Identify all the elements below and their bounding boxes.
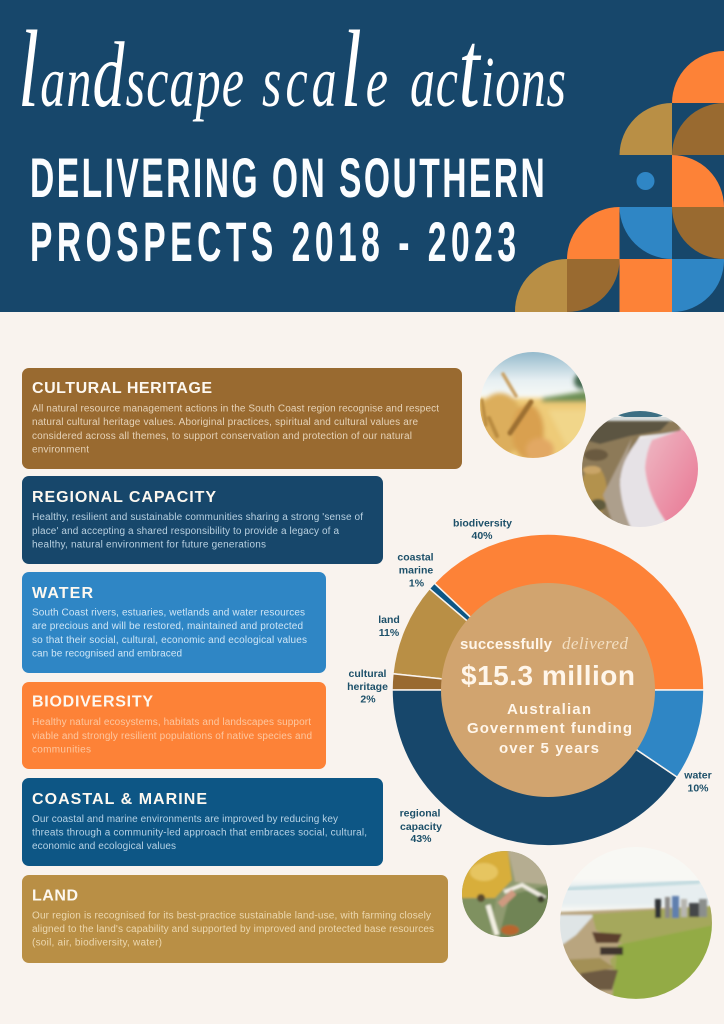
text: coastal and marine: threats through a community-led approach that embraces social, cultural, bbox=[32, 828, 367, 838]
script title: landscape bbox=[18, 9, 244, 130]
centre text: Australian bbox=[507, 701, 591, 718]
panel: coastal and marine bbox=[22, 778, 383, 866]
text: biodiversity: viable and strongly resilient populations of native species and bbox=[32, 731, 312, 742]
centre text: $15.3 million bbox=[461, 660, 635, 691]
heading: water: WATER bbox=[32, 585, 93, 602]
label: biodiversity 40%: 40% bbox=[471, 530, 493, 542]
label: cultural heritage 2%: heritage bbox=[347, 681, 388, 693]
text: coastal and marine bbox=[32, 814, 367, 852]
text: biodiversity bbox=[32, 717, 312, 756]
centre text: Government funding bbox=[467, 720, 632, 737]
heading: coastal and marine: COASTAL & MARINE bbox=[32, 791, 207, 808]
text: biodiversity: communities bbox=[32, 744, 91, 756]
text: coastal and marine: economic and ecological values bbox=[32, 841, 176, 852]
text: cultural heritage: All natural resource management actions in the South Coast region recognise and respect bbox=[32, 404, 439, 414]
heading: regional capacity: REGIONAL CAPACITY bbox=[32, 489, 216, 506]
text: regional capacity: place' and accepting a shared responsibility to provide a legacy of a bbox=[32, 526, 339, 537]
text: coastal and marine: Our coastal and marine environments are improved by reducing key bbox=[32, 814, 338, 825]
label: regional capacity 43%: 43% bbox=[410, 833, 432, 845]
text: water: can be recognised and embraced bbox=[32, 648, 182, 660]
label: water 10%: 10% bbox=[687, 782, 709, 794]
panel: biodiversity bbox=[22, 682, 326, 769]
main heading: DELIVERING ON SOUTHERN bbox=[30, 146, 545, 209]
main heading: PROSPECTS 2018 - 2023 bbox=[30, 210, 516, 273]
label: land 11%: 11% bbox=[379, 627, 400, 639]
text: biodiversity: Healthy natural ecosystems, habitats and landscapes support bbox=[32, 717, 311, 728]
text: cultural heritage: natural cultural heritage values. Aboriginal practices, spiritual and cultural values are bbox=[32, 417, 418, 428]
text: water bbox=[32, 608, 307, 660]
label: land 11%: land bbox=[378, 614, 400, 626]
label: cultural heritage 2%: cultural bbox=[349, 668, 387, 680]
centre text: successfully bbox=[460, 636, 553, 653]
photo: coastal plants bbox=[460, 850, 550, 940]
heading: cultural heritage: CULTURAL HERITAGE bbox=[32, 380, 212, 397]
text: cultural heritage: environment bbox=[32, 444, 89, 456]
centre circle bbox=[441, 583, 655, 797]
label: coastal marine 1%: coastal bbox=[397, 552, 434, 564]
geometric pattern bbox=[515, 51, 724, 312]
text: land bbox=[32, 910, 434, 948]
label: cultural heritage 2%: 2% bbox=[360, 694, 376, 706]
label: regional capacity 43%: regional bbox=[400, 808, 441, 820]
text: land: (soil, air, biodiversity, water) bbox=[32, 938, 162, 948]
heading: biodiversity: BIODIVERSITY bbox=[32, 694, 153, 710]
label: coastal marine 1%: marine bbox=[399, 564, 433, 576]
label: coastal marine 1%: 1% bbox=[409, 578, 425, 590]
text: regional capacity: healthy, natural environment for future generations bbox=[32, 540, 266, 550]
text: regional capacity: Healthy, resilient and sustainable communities sharing a strong 'sense of bbox=[32, 512, 363, 523]
photo: wheat field bbox=[480, 352, 586, 458]
text: water: South Coast rivers, estuaries, wetlands and water resources bbox=[32, 608, 305, 618]
centre text: over 5 years bbox=[499, 740, 599, 757]
text: cultural heritage bbox=[32, 404, 439, 456]
segment: water 10% bbox=[548, 690, 704, 777]
label: regional capacity 43%: capacity bbox=[400, 821, 442, 833]
text: land: aligned to the land's capability and supported by improved and protected base resources bbox=[32, 924, 434, 935]
script title bbox=[18, 9, 566, 130]
donut chart: funding by theme bbox=[392, 534, 704, 846]
panel: land bbox=[22, 875, 448, 963]
label: biodiversity 40%: biodiversity bbox=[453, 518, 512, 530]
text: water: are precious and will be restored, maintained and protected bbox=[32, 621, 303, 632]
header banner bbox=[0, 0, 724, 312]
script title: scale bbox=[262, 9, 388, 130]
centre text bbox=[460, 634, 635, 757]
photo: pink lake coast bbox=[580, 408, 702, 530]
text: water: so that their social, cultural, economic and ecological values bbox=[32, 635, 307, 646]
text: regional capacity bbox=[32, 512, 363, 550]
photo: saltmarsh shoreline with people bbox=[560, 880, 712, 999]
panel: water bbox=[22, 572, 326, 673]
segment: regional capacity 43% bbox=[392, 690, 677, 846]
panel: regional capacity bbox=[22, 476, 383, 564]
main heading bbox=[30, 146, 545, 273]
heading: land: LAND bbox=[32, 888, 78, 904]
segment: cultural heritage 2% bbox=[392, 674, 548, 690]
centre text: delivered bbox=[562, 634, 628, 653]
segment: biodiversity 40% bbox=[434, 534, 704, 690]
segment: land 11% bbox=[393, 589, 548, 690]
segment: coastal marine 1% bbox=[429, 583, 548, 690]
label: water 10%: water bbox=[683, 770, 712, 782]
panel: cultural heritage bbox=[22, 368, 462, 469]
text: cultural heritage: considered across all themes, to support conservation and protection of our natural bbox=[32, 431, 412, 442]
text: land: Our region is recognised for its best-practice sustainable land-use, with farming closely bbox=[32, 910, 431, 922]
script title: actions bbox=[410, 9, 566, 130]
